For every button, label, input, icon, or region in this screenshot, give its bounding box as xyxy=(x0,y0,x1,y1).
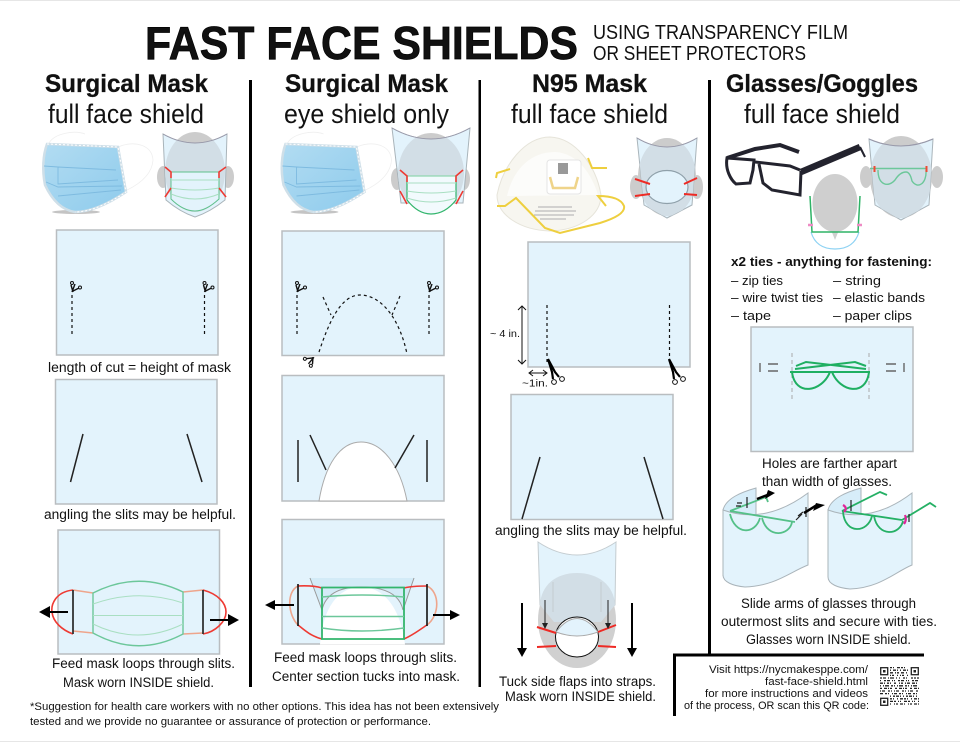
panel: vertical cuts xyxy=(56,230,218,355)
caption: Glasses worn INSIDE shield. xyxy=(746,632,911,647)
heading: Surgical Mask xyxy=(285,70,448,98)
caption: Mask worn INSIDE shield. xyxy=(505,689,656,704)
goggles shield diagram xyxy=(860,136,943,220)
caption xyxy=(762,456,897,489)
panel: N95 cuts with dimensions: ~1in. xyxy=(522,378,548,390)
mask photo xyxy=(282,132,392,214)
panel: mask fed through slits xyxy=(39,530,239,654)
caption: than width of glasses. xyxy=(762,474,892,489)
caption xyxy=(272,650,460,684)
mask photo xyxy=(43,132,153,214)
heading xyxy=(511,70,668,129)
heading xyxy=(284,70,449,129)
title: FAST FACE SHIELDS xyxy=(145,17,578,69)
heading: full face shield xyxy=(744,99,900,129)
caption: Feed mask loops through slits. xyxy=(274,650,457,665)
panel: N95 cuts with dimensions xyxy=(490,242,690,390)
tie options list: – paper clips xyxy=(833,308,913,323)
disclaimer footnote: *Suggestion for health care workers with no other options. This idea has not been extensively xyxy=(30,701,500,713)
eye shield diagram xyxy=(391,128,470,214)
caption: outermost slits and secure with ties. xyxy=(721,614,937,629)
disclaimer footnote xyxy=(30,701,500,728)
caption xyxy=(721,596,937,647)
link callout xyxy=(684,664,869,712)
heading: full face shield xyxy=(48,99,204,129)
right cylinder xyxy=(828,488,936,589)
N95 shield diagram xyxy=(630,138,703,218)
caption xyxy=(52,656,235,690)
link callout: for more instructions and videos xyxy=(705,688,869,700)
N95 photo xyxy=(496,137,624,233)
caption: Center section tucks into mask. xyxy=(272,669,460,684)
caption: angling the slits may be helpful. xyxy=(495,523,687,538)
column 1: surgical mask full face shield xyxy=(39,70,239,690)
heading: Surgical Mask xyxy=(45,70,208,98)
panel: mask fed through slits xyxy=(265,520,460,644)
caption: angling the slits may be helpful. xyxy=(44,507,236,522)
QR code xyxy=(880,668,919,705)
subtitle: USING TRANSPARENCY FILM xyxy=(593,21,848,44)
panel: glasses placement xyxy=(751,327,913,452)
column dividers xyxy=(249,80,924,716)
head from above with glasses xyxy=(808,174,862,249)
caption xyxy=(499,674,656,704)
link callout: Visit https://nycmakesppe.com/ xyxy=(709,664,869,676)
caption: length of cut = height of mask xyxy=(48,360,231,375)
tuck flaps diagram xyxy=(517,542,637,668)
panel: cut pattern xyxy=(282,231,444,368)
heading: N95 Mask xyxy=(532,70,647,98)
caption: Slide arms of glasses through xyxy=(741,596,916,611)
caption: Feed mask loops through slits. xyxy=(52,656,235,671)
tie options list: – zip ties xyxy=(731,273,783,288)
caption: Mask worn INSIDE shield. xyxy=(63,675,214,690)
disclaimer footnote: tested and we provide no guarantee or assurance of protection or performance. xyxy=(30,716,431,728)
tie options list xyxy=(731,254,932,323)
caption: Tuck side flaps into straps. xyxy=(499,674,656,689)
panel: angled slits xyxy=(511,394,673,520)
subtitle: OR SHEET PROTECTORS xyxy=(593,42,806,65)
link callout: of the process, OR scan this QR code: xyxy=(684,700,869,712)
glasses photo xyxy=(727,145,865,195)
heading: full face shield xyxy=(511,99,668,129)
tie options list: x2 ties - anything for fastening: xyxy=(731,254,932,269)
column 4: glasses and goggles xyxy=(721,70,943,647)
cylinder shields with glasses xyxy=(723,488,936,589)
panel: N95 cuts with dimensions: ~ 4 in. xyxy=(490,329,520,340)
column 3: N95 mask xyxy=(490,70,703,704)
left cylinder xyxy=(723,488,825,587)
tie options list: – string xyxy=(833,273,881,288)
panel: angled slits xyxy=(56,380,217,504)
tie options list: – wire twist ties xyxy=(731,290,824,305)
heading: Glasses/Goggles xyxy=(726,70,918,98)
link callout: fast-face-shield.html xyxy=(765,676,868,688)
caption: Holes are farther apart xyxy=(762,456,897,471)
panel: cut result xyxy=(282,376,444,501)
heading: eye shield only xyxy=(284,99,449,129)
heading xyxy=(45,70,208,129)
heading xyxy=(726,70,918,129)
tie options list: – elastic bands xyxy=(833,290,926,305)
subtitle xyxy=(593,21,848,65)
tie options list: – tape xyxy=(731,308,771,323)
column 2: surgical mask eye shield xyxy=(265,70,470,684)
shield on face diagram xyxy=(157,132,234,217)
